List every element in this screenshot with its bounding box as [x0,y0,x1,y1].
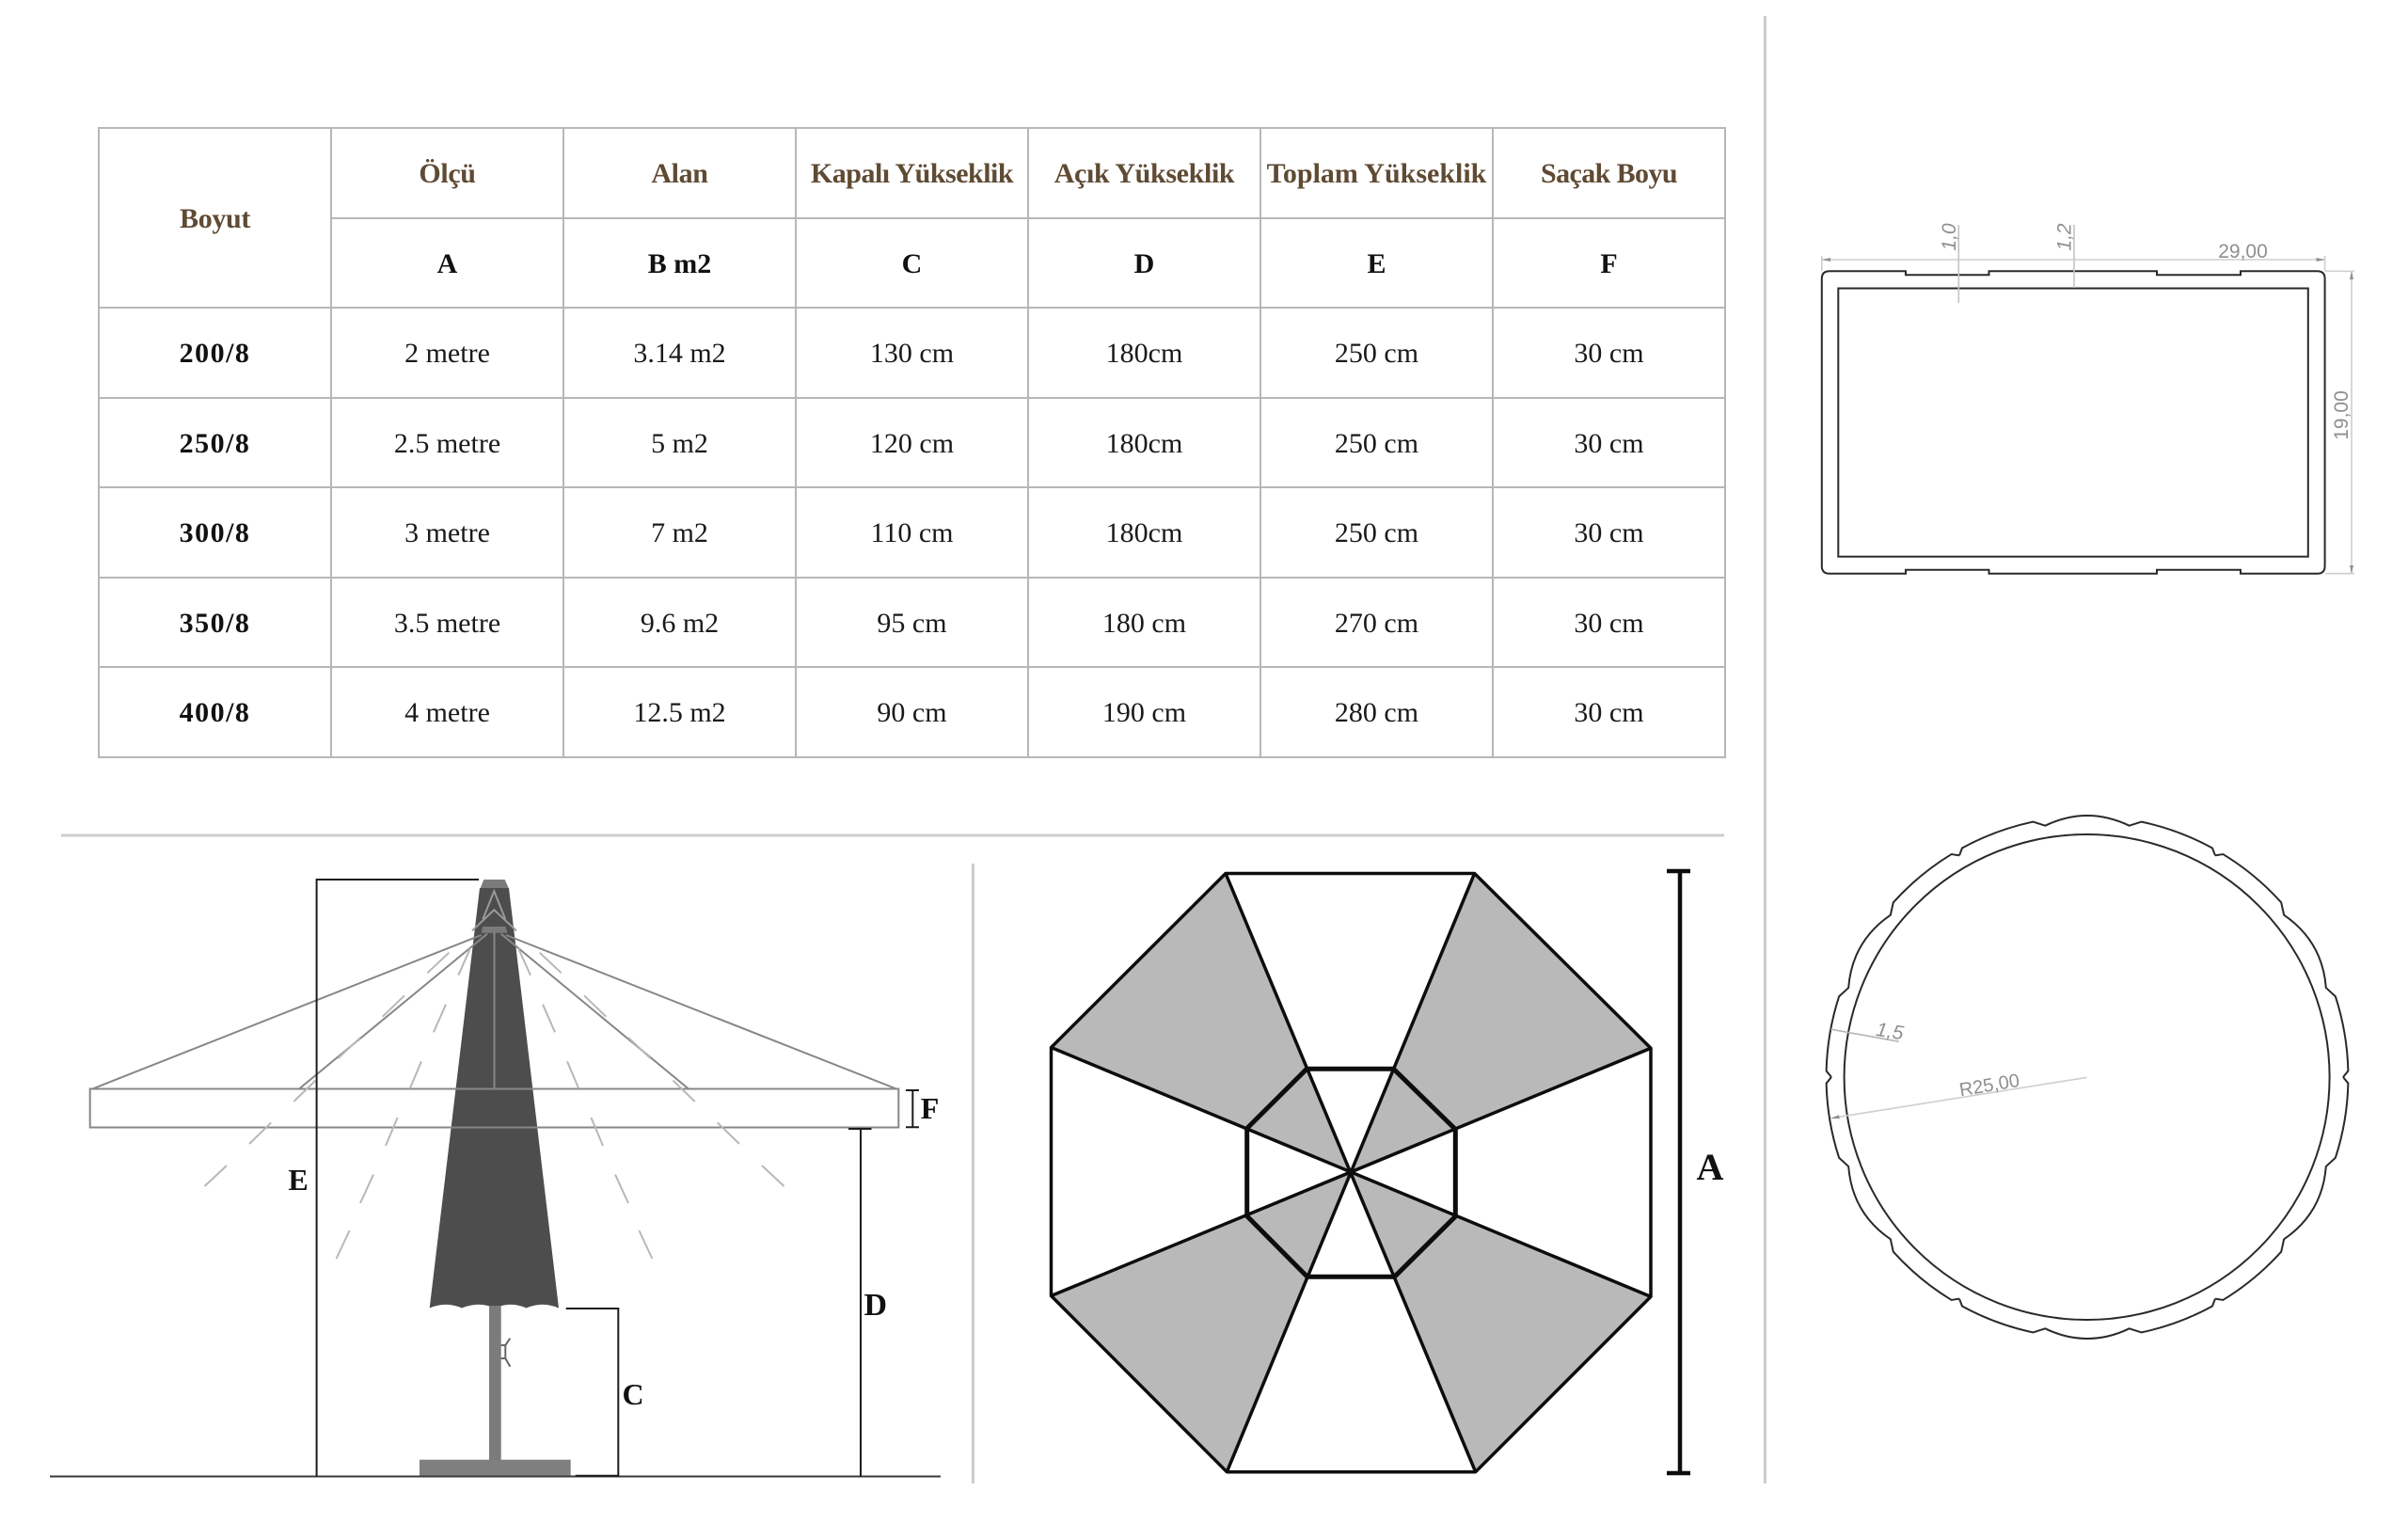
table: size specifications: Saçak Boyu [1541,158,1677,189]
table: size specifications: 30 cm [1574,697,1644,728]
table: size specifications: 30 cm [1574,428,1644,459]
diagram: round profile section [1797,816,2378,1339]
dimension 1,5 [1830,1019,1906,1044]
dimension F: F [921,1091,939,1125]
table: size specifications: E [1367,248,1386,279]
dimension 19,00 [2325,271,2354,574]
table: size specifications: 400/8 [180,697,250,728]
table: size specifications: 120 cm [870,428,954,459]
dimension D [848,1129,887,1477]
table: size specifications: 250/8 [180,428,250,459]
table: size specifications: Boyut [180,203,250,234]
dimension 1,2: 1,2 [2054,223,2075,251]
finial arrow lines [472,891,516,930]
dimension 19,00: 19,00 [2331,390,2353,440]
table: size specifications [98,127,1726,758]
table: size specifications: Ölçü [419,158,476,189]
table: size specifications: 180cm [1106,517,1182,548]
table: size specifications: Toplam Yükseklik [1267,158,1486,189]
dimension R25,00 [1830,1071,2086,1118]
table: size specifications: F [1600,248,1618,279]
table: size specifications: 110 cm [870,517,954,548]
pole [489,1306,501,1460]
table: size specifications: 130 cm [870,338,954,369]
dimension 1,2 [2054,223,2075,288]
dimension 1,5: 1,5 [1875,1019,1906,1044]
table: size specifications: A [437,248,457,279]
diagram: rectangular profile section [1822,223,2354,574]
table: size specifications: 5 m2 [651,428,708,459]
diagram: octagonal canopy top view [1052,871,1724,1473]
table: size specifications: 90 cm [877,697,947,728]
dimension E [288,880,479,1477]
dimension 1,0 [1939,223,1960,303]
dimension A: A [1697,1146,1724,1188]
umbrella finial [481,880,509,888]
table: size specifications: 9.6 m2 [641,608,719,639]
table: size specifications: 30 cm [1574,608,1644,639]
open canopy outline [90,932,898,1127]
hub [482,927,507,933]
dashed ribs [205,948,784,1259]
table: size specifications: Alan [651,158,708,189]
table: size specifications: 7 m2 [651,517,708,548]
dimension F [906,1090,939,1127]
table: size specifications: 4 metre [404,697,490,728]
table: size specifications: 350/8 [180,608,250,639]
ground line [50,1475,941,1477]
diagram: open and closed umbrella side view [50,880,941,1477]
dimension C: C [622,1377,644,1411]
table: size specifications: 180 cm [1102,608,1186,639]
table: size specifications: 12.5 m2 [633,697,726,728]
table: size specifications: 250 cm [1335,428,1418,459]
table: size specifications: Kapalı Yükseklik [811,158,1013,189]
table: size specifications: 3.5 metre [394,608,500,639]
inner circle [1845,834,2330,1320]
table: size specifications: 30 cm [1574,517,1644,548]
table: size specifications: 200/8 [180,338,250,369]
closed umbrella canopy [430,888,559,1308]
table: size specifications: 2.5 metre [394,428,500,459]
table: size specifications: B m2 [648,248,711,279]
table: size specifications: 250 cm [1335,517,1418,548]
table: size specifications: 270 cm [1335,608,1418,639]
shaded panels [1052,873,1651,1472]
dimension 29,00 [1822,241,2325,271]
table: size specifications: 300/8 [180,517,250,548]
dimension R25,00: R25,00 [1957,1071,2021,1101]
dimension C [566,1309,644,1476]
outer notched profile [1797,816,2378,1339]
table: size specifications: Açık Yükseklik [1054,158,1234,189]
dimension D: D [863,1288,887,1323]
table: size specifications: 3 metre [404,517,490,548]
table: size specifications: 190 cm [1102,697,1186,728]
dimension 1,0: 1,0 [1939,223,1960,251]
table: size specifications: 3.14 m2 [633,338,726,369]
pole handle [501,1339,510,1367]
dimension 29,00: 29,00 [2218,241,2268,262]
inner profile [1838,288,2308,557]
table: size specifications: 250 cm [1335,338,1418,369]
table: size specifications: 95 cm [877,608,947,639]
table: size specifications: 280 cm [1335,697,1418,728]
table: size specifications: 30 cm [1574,338,1644,369]
dimension E: E [288,1163,309,1197]
table: size specifications: D [1134,248,1154,279]
base plate [420,1460,571,1476]
dimension A [1667,871,1724,1473]
outer octagon and spokes [1052,873,1651,1472]
table: size specifications: 180cm [1106,338,1182,369]
table: size specifications: 2 metre [404,338,490,369]
inner octagon [1247,1069,1455,1277]
table: size specifications: 180cm [1106,428,1182,459]
outer profile [1822,271,2325,574]
table: size specifications: C [902,248,922,279]
